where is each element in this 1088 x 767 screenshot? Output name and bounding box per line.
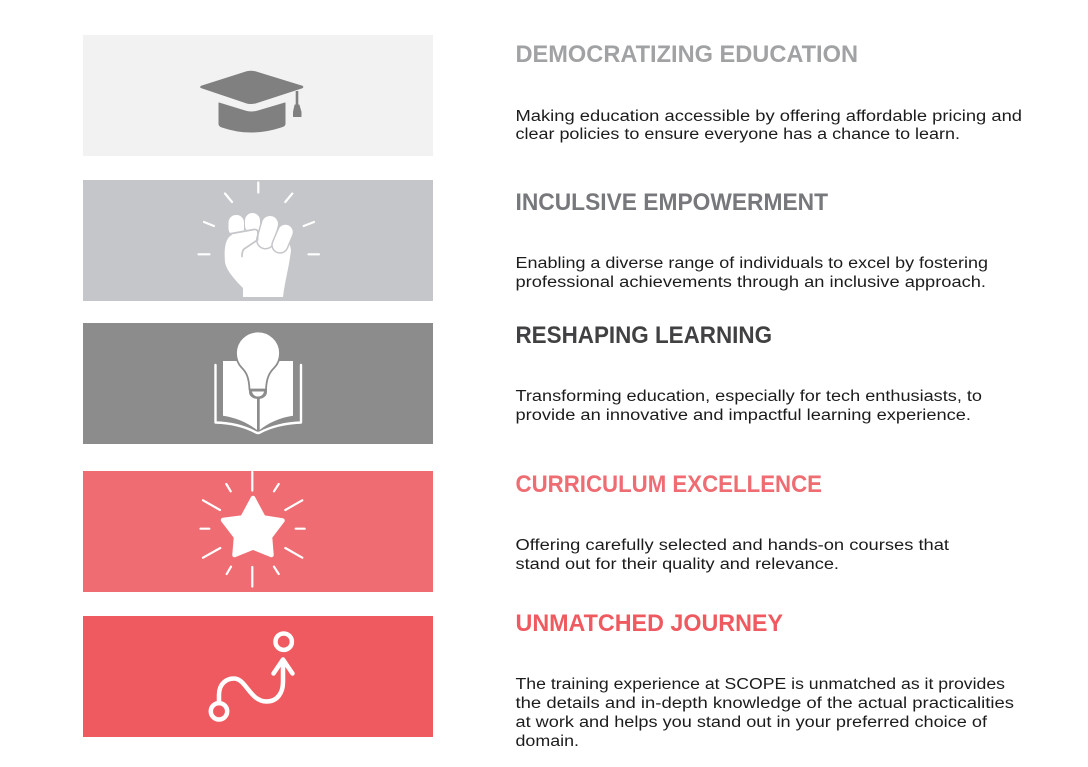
card background — [83, 323, 433, 444]
panel: reshaping learning — [83, 322, 982, 444]
description: Making education accessible by offering affordable pricing and — [516, 108, 1022, 125]
description — [516, 255, 988, 291]
card background — [83, 180, 433, 301]
description: clear policies to ensure everyone has a chance to learn. — [516, 126, 960, 143]
description: Transforming education, especially for tech enthusiasts, to — [516, 388, 982, 405]
description: The training experience at SCOPE is unmatched as it provides — [516, 676, 1005, 693]
description — [516, 537, 950, 573]
description: Offering carefully selected and hands-on courses that — [516, 537, 950, 554]
description — [516, 676, 1014, 750]
heading: DEMOCRATIZING EDUCATION — [516, 41, 858, 68]
description: Enabling a diverse range of individuals to excel by fostering — [516, 255, 988, 272]
panel: democratizing education — [83, 35, 1022, 156]
heading: CURRICULUM EXCELLENCE — [516, 471, 822, 498]
description — [516, 388, 982, 424]
description: provide an innovative and impactful learning experience. — [516, 407, 971, 424]
card background — [83, 616, 433, 737]
description: the details and in-depth knowledge of the actual practicalities — [516, 695, 1014, 712]
panel: inclusive empowerment — [83, 180, 988, 301]
icon: winding path to goal — [211, 634, 292, 720]
card background — [83, 471, 433, 592]
description: at work and helps you stand out in your preferred choice of — [516, 714, 988, 731]
description: professional achievements through an inclusive approach. — [516, 274, 986, 291]
description: domain. — [516, 733, 579, 750]
icon: raised fist — [198, 182, 319, 297]
description — [516, 108, 1022, 143]
panel: curriculum excellence — [83, 471, 950, 592]
icon: open book with light bulb — [216, 332, 301, 433]
description: stand out for their quality and relevance. — [516, 556, 839, 573]
heading: UNMATCHED JOURNEY — [516, 610, 783, 637]
icon: graduation cap — [202, 72, 302, 132]
panel: unmatched journey — [83, 610, 1014, 750]
card background — [83, 35, 433, 156]
icon: shining star — [200, 472, 305, 586]
heading: INCULSIVE EMPOWERMENT — [516, 189, 828, 216]
heading: RESHAPING LEARNING — [516, 322, 772, 349]
